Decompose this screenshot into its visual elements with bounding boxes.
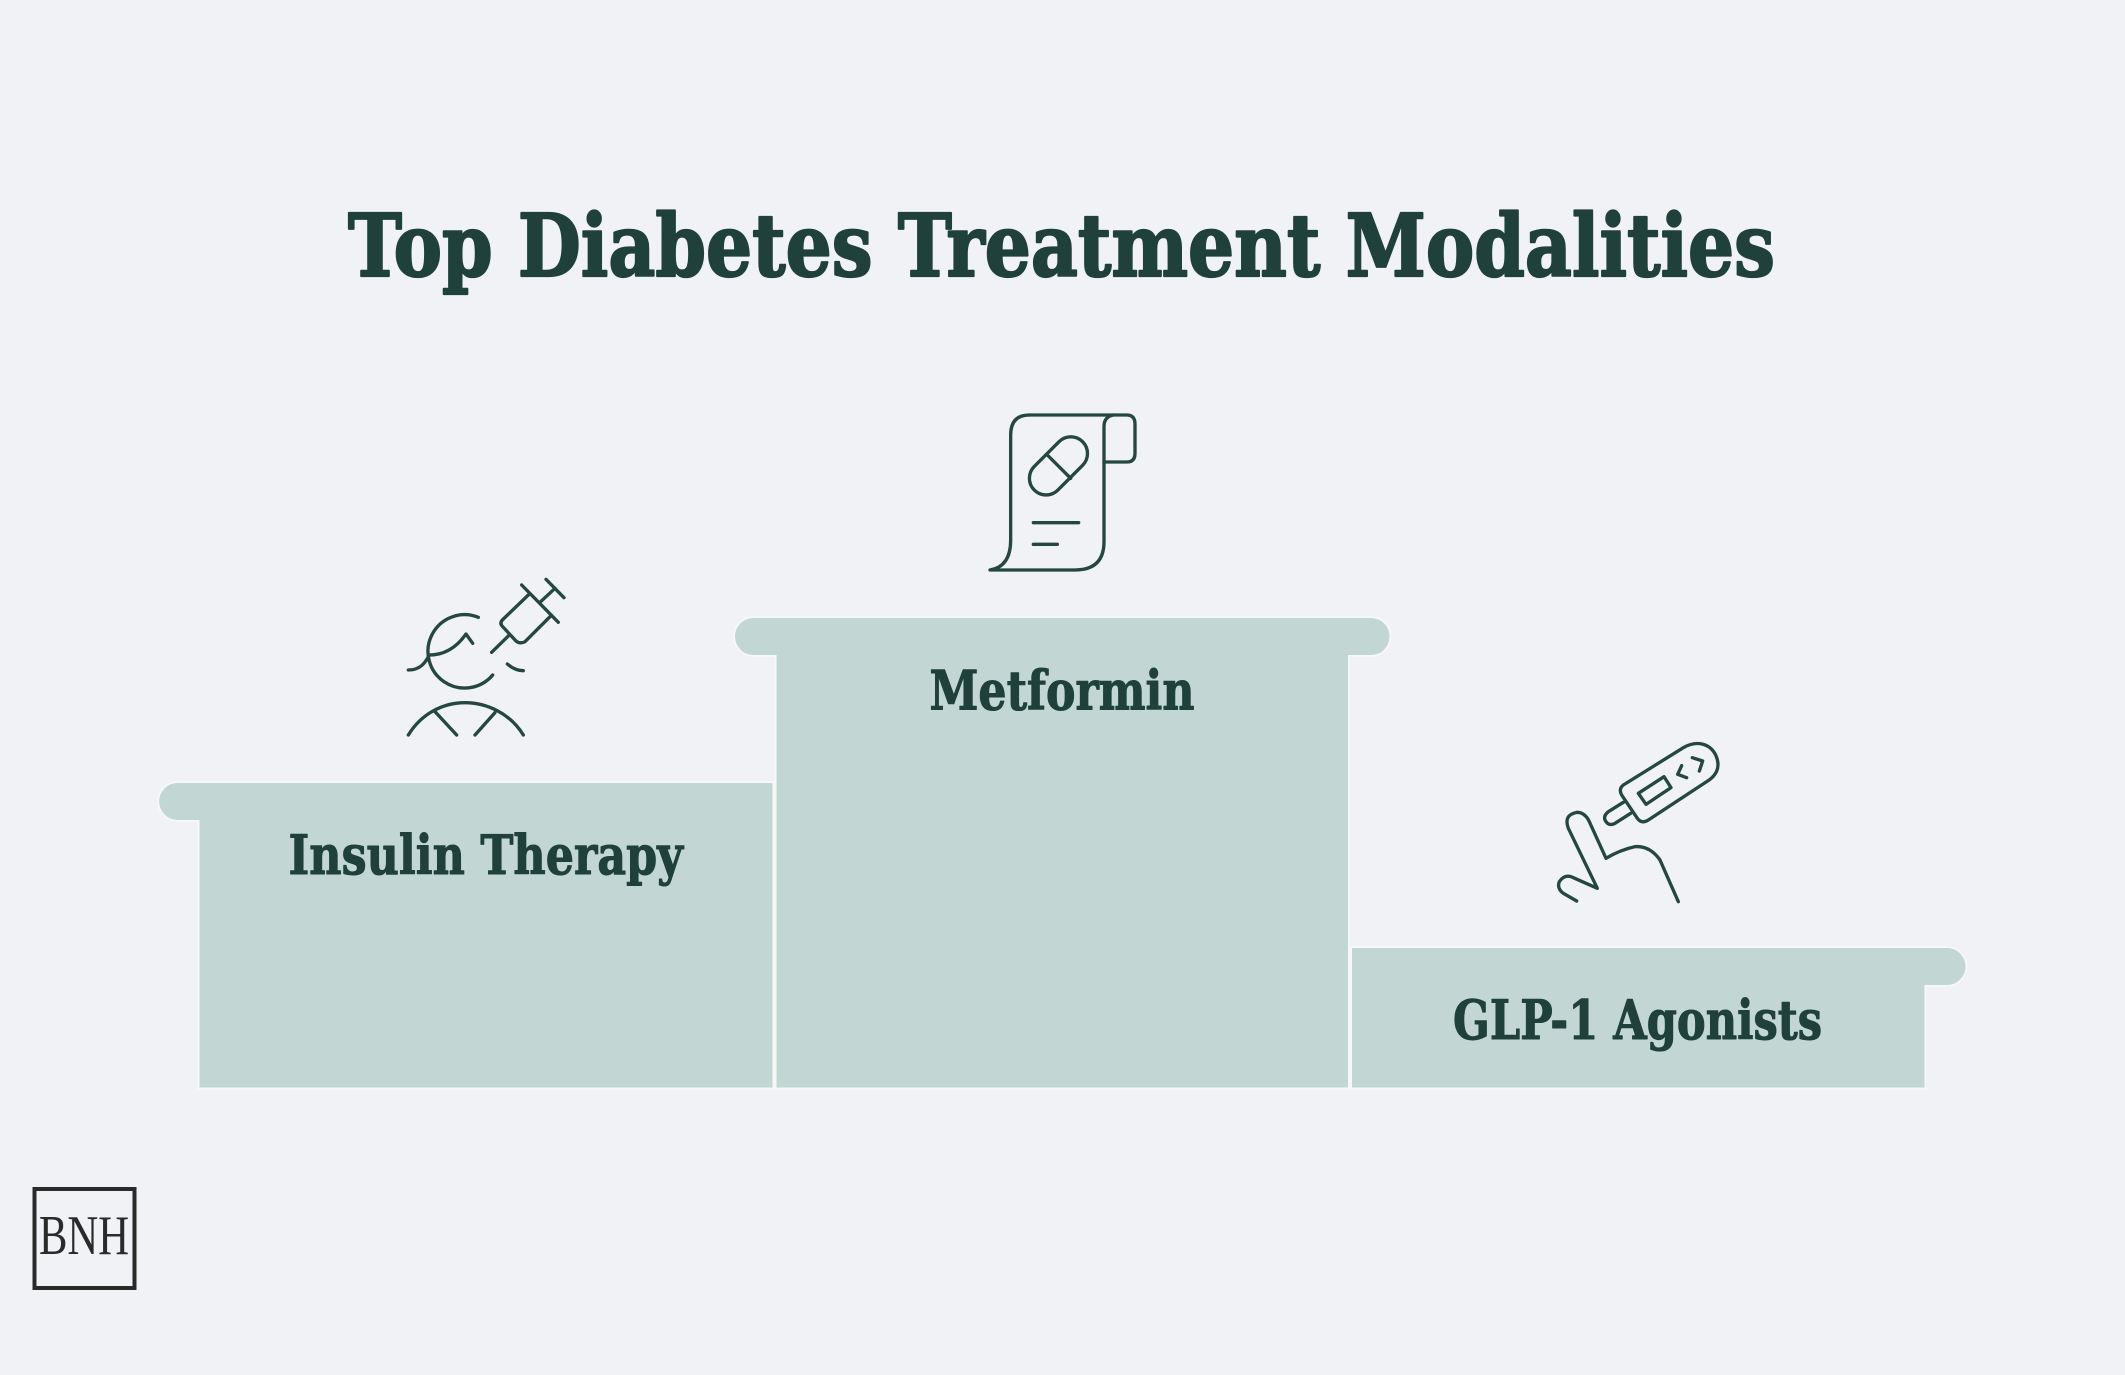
- icon: prescription scroll with pill: [990, 415, 1135, 570]
- title: Top Diabetes Treatment Modalities: [348, 196, 1775, 297]
- logo: BNH: [34, 1189, 134, 1288]
- panel: glp-1 agonists podium: [1351, 947, 1966, 1088]
- panel: glp-1 agonists podium: GLP-1 Agonists: [1453, 988, 1822, 1052]
- icon: finger and glucose test device: [1559, 744, 1718, 902]
- panel: insulin therapy podium: Insulin Therapy: [288, 823, 684, 887]
- panel: metformin podium: [734, 617, 1390, 1088]
- logo: BNH: BNH: [39, 1205, 129, 1267]
- panel: metformin podium: Metformin: [930, 658, 1194, 722]
- icon: person receiving insulin syringe: [408, 579, 564, 735]
- panel: insulin therapy podium: [158, 782, 773, 1088]
